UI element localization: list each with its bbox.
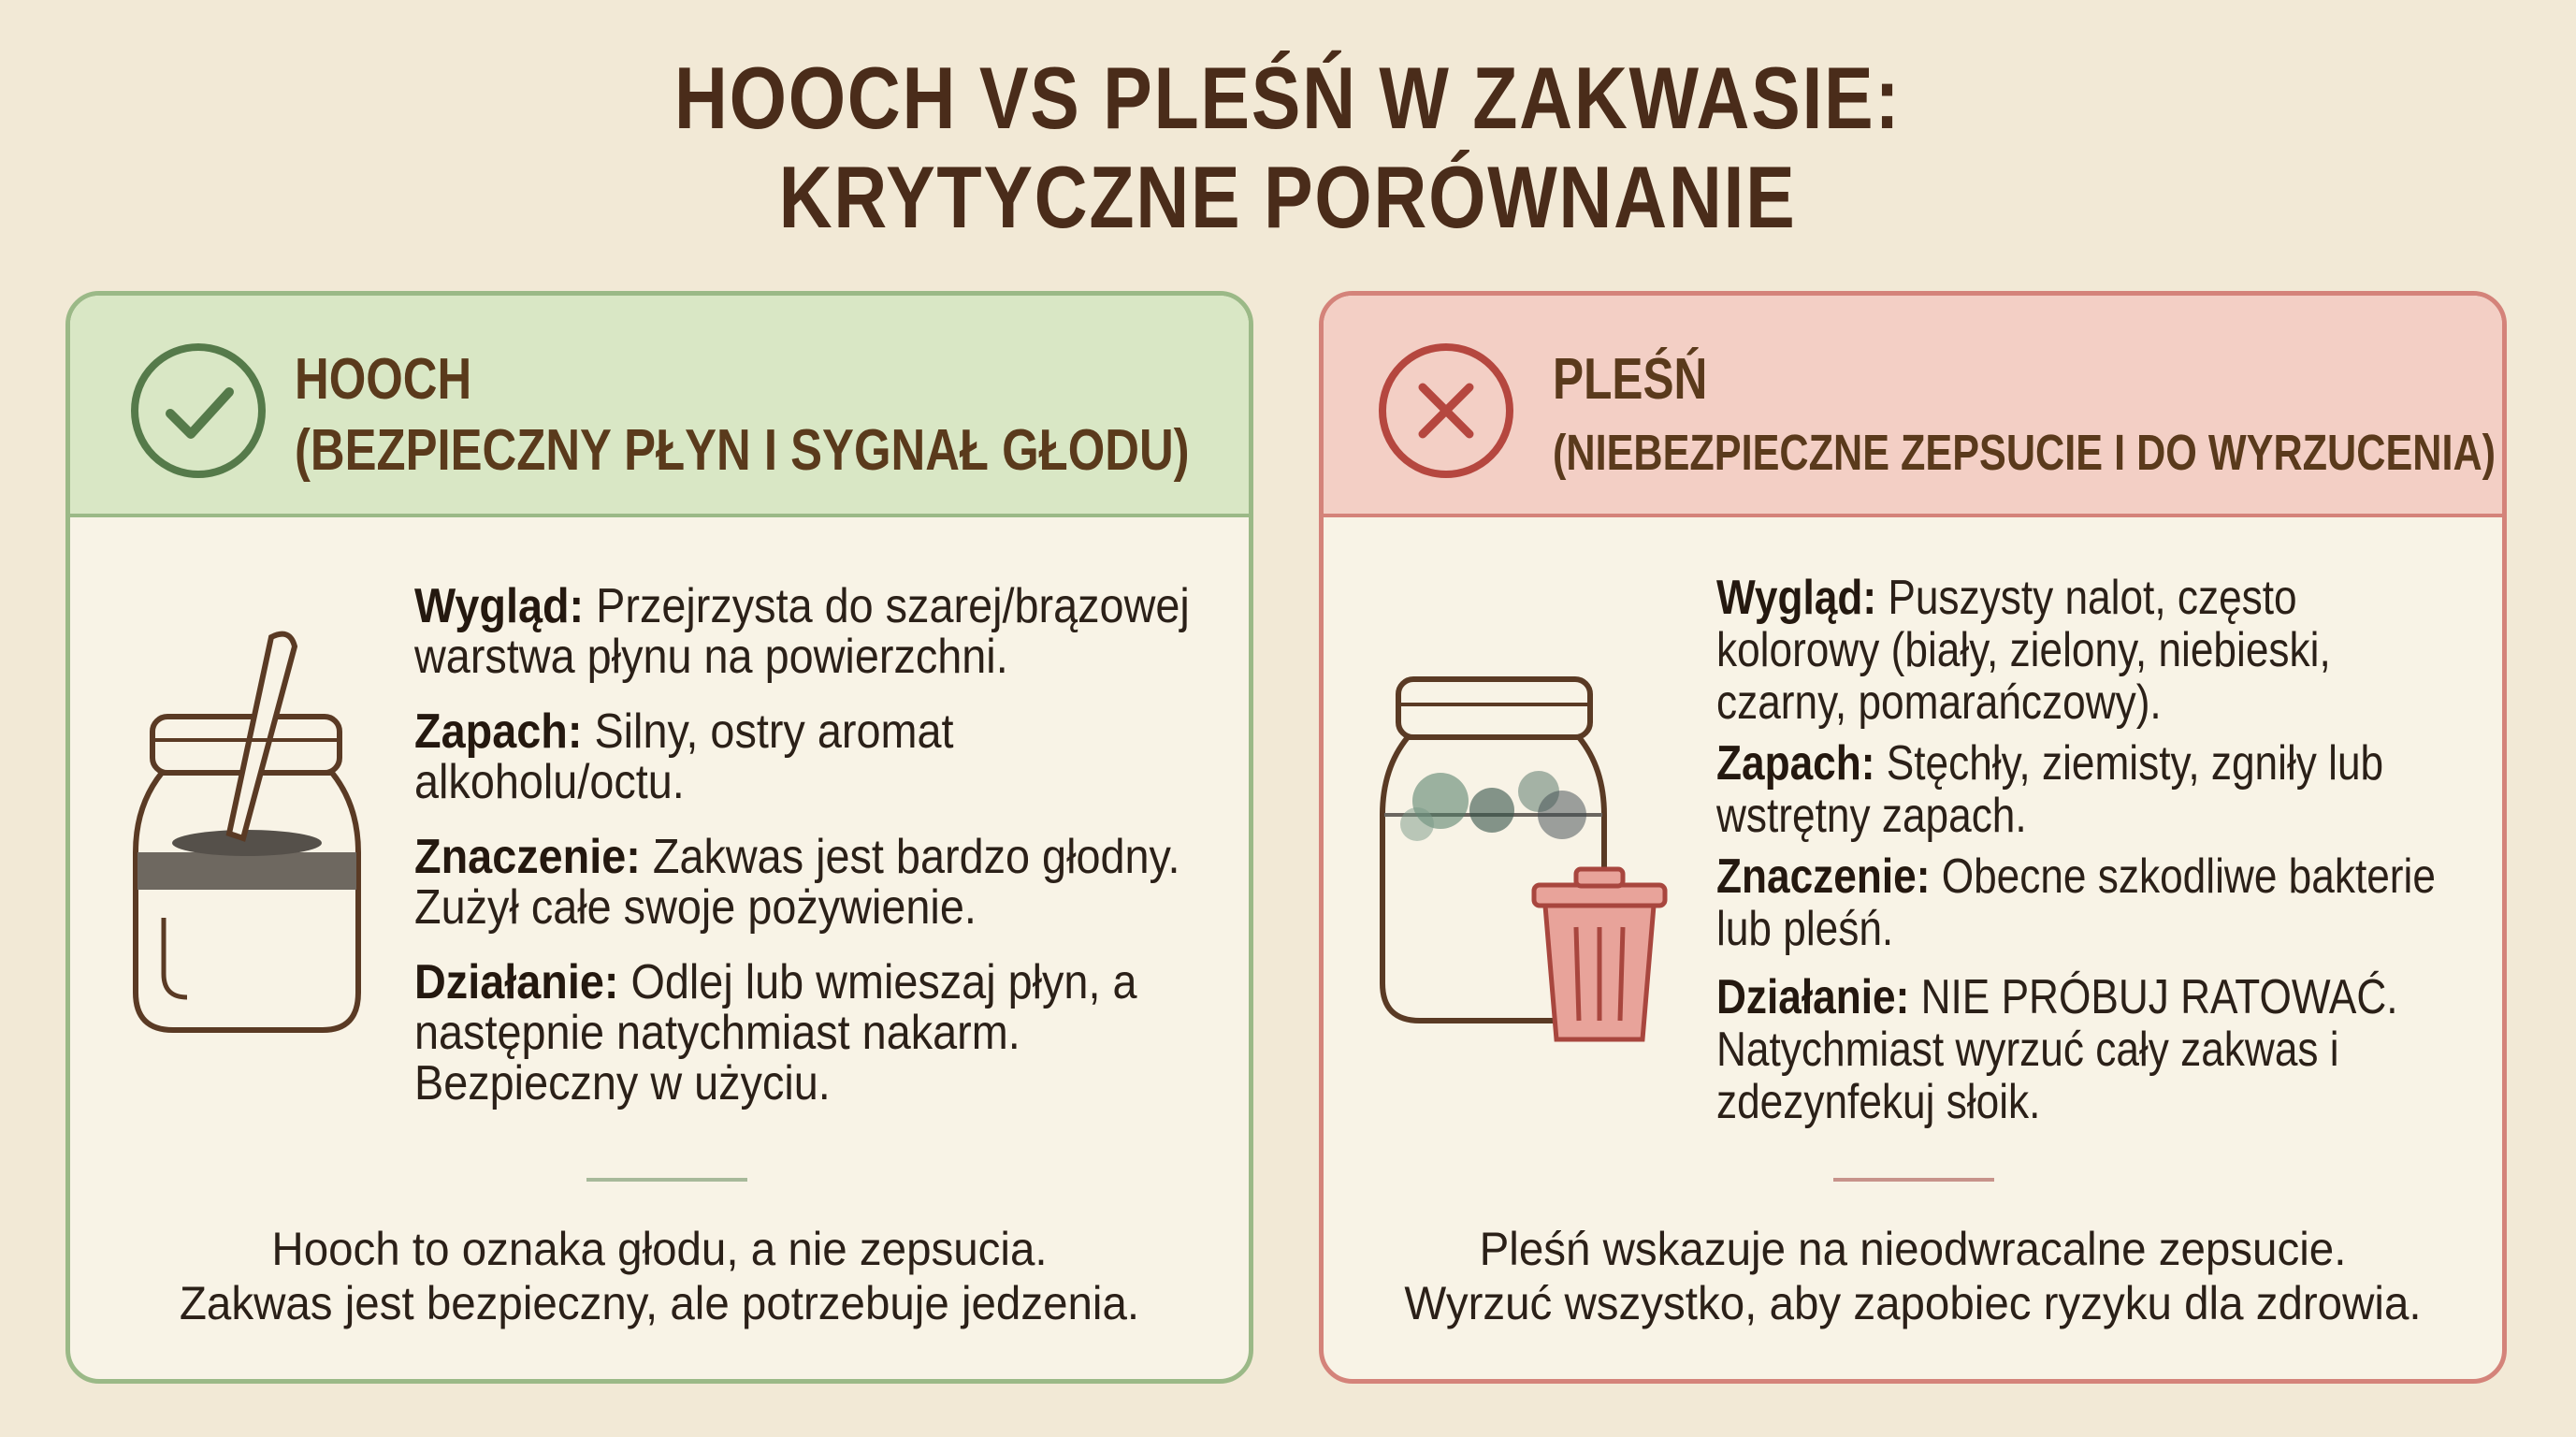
footer: mold summary: Pleśń wskazuje na nieodwracalne zepsucie. — [1480, 1223, 2346, 1275]
footer: hooch summary: Zakwas jest bezpieczny, ale potrzebuje jedzenia. — [180, 1277, 1139, 1329]
text: mold details: Działanie: NIE PRÓBUJ RATOWAĆ. — [1716, 970, 2398, 1024]
heading: hooch — [295, 347, 1190, 483]
footer: hooch summary — [180, 1223, 1139, 1329]
text: hooch details: Zapach: Silny, ostry aromat — [414, 704, 953, 759]
text: mold details: Wygląd: Puszysty nalot, często — [1716, 571, 2297, 625]
panel: mold — [1319, 291, 2507, 1384]
heading: hooch: (BEZPIECZNY PŁYN I SYGNAŁ GŁODU) — [295, 418, 1190, 483]
header: mold — [1324, 296, 2502, 517]
text: hooch details: Znaczenie: Zakwas jest bardzo głodny. — [414, 830, 1179, 884]
text: mold details: Zapach: Stęchły, ziemisty, zgniły lub — [1716, 736, 2383, 791]
footer: hooch summary: Hooch to oznaka głodu, a nie zepsucia. — [271, 1223, 1048, 1275]
text: hooch details: następnie natychmiast nakarm. — [414, 1006, 1020, 1060]
header: hooch — [70, 296, 1249, 517]
text: hooch details: Zużył całe swoje pożywienie. — [414, 880, 977, 935]
text: hooch details: Bezpieczny w użyciu. — [414, 1056, 831, 1110]
icon: moldy jar with trash can — [1380, 676, 1667, 1042]
heading: mold: (NIEBEZPIECZNE ZEPSUCIE I DO WYRZUCENIA) — [1553, 425, 2496, 481]
title: HOOCH VS PLEŚŃ W ZAKWASIE: — [674, 49, 1902, 147]
text: hooch details: alkoholu/octu. — [414, 755, 685, 809]
title: KRYTYCZNE PORÓWNANIE — [779, 148, 1797, 246]
text: hooch details: warstwa płynu na powierzchni. — [414, 630, 1008, 684]
text: mold details: wstrętny zapach. — [1716, 789, 2027, 843]
text: hooch details: Wygląd: Przejrzysta do szarej/brązowej — [414, 579, 1190, 633]
text: mold details: kolorowy (biały, zielony, niebieski, — [1716, 623, 2331, 677]
icon: jar with hooch — [133, 631, 361, 1033]
panel: hooch — [65, 291, 1253, 1384]
icon: check — [131, 343, 266, 478]
text: mold details: lub pleśń. — [1716, 902, 1893, 956]
text: hooch details: Działanie: Odlej lub wmieszaj płyn, a — [414, 955, 1137, 1009]
text: mold details: czarny, pomarańczowy). — [1716, 675, 2162, 730]
heading: mold: PLEŚŃ — [1553, 347, 1707, 412]
title — [674, 49, 1902, 246]
text: mold details: Znaczenie: Obecne szkodliwe bakterie — [1716, 849, 2436, 904]
footer: mold summary — [1404, 1223, 2422, 1329]
heading: mold — [1553, 347, 2496, 481]
text: hooch details — [414, 579, 1190, 1110]
text: mold details: zdezynfekuj słoik. — [1716, 1075, 2040, 1129]
text: mold details — [1716, 571, 2436, 1129]
text: mold details: Natychmiast wyrzuć cały zakwas i — [1716, 1023, 2339, 1077]
icon: x mark — [1379, 343, 1513, 478]
footer: mold summary: Wyrzuć wszystko, aby zapobiec ryzyku dla zdrowia. — [1404, 1277, 2422, 1329]
heading: hooch: HOOCH — [295, 347, 471, 412]
